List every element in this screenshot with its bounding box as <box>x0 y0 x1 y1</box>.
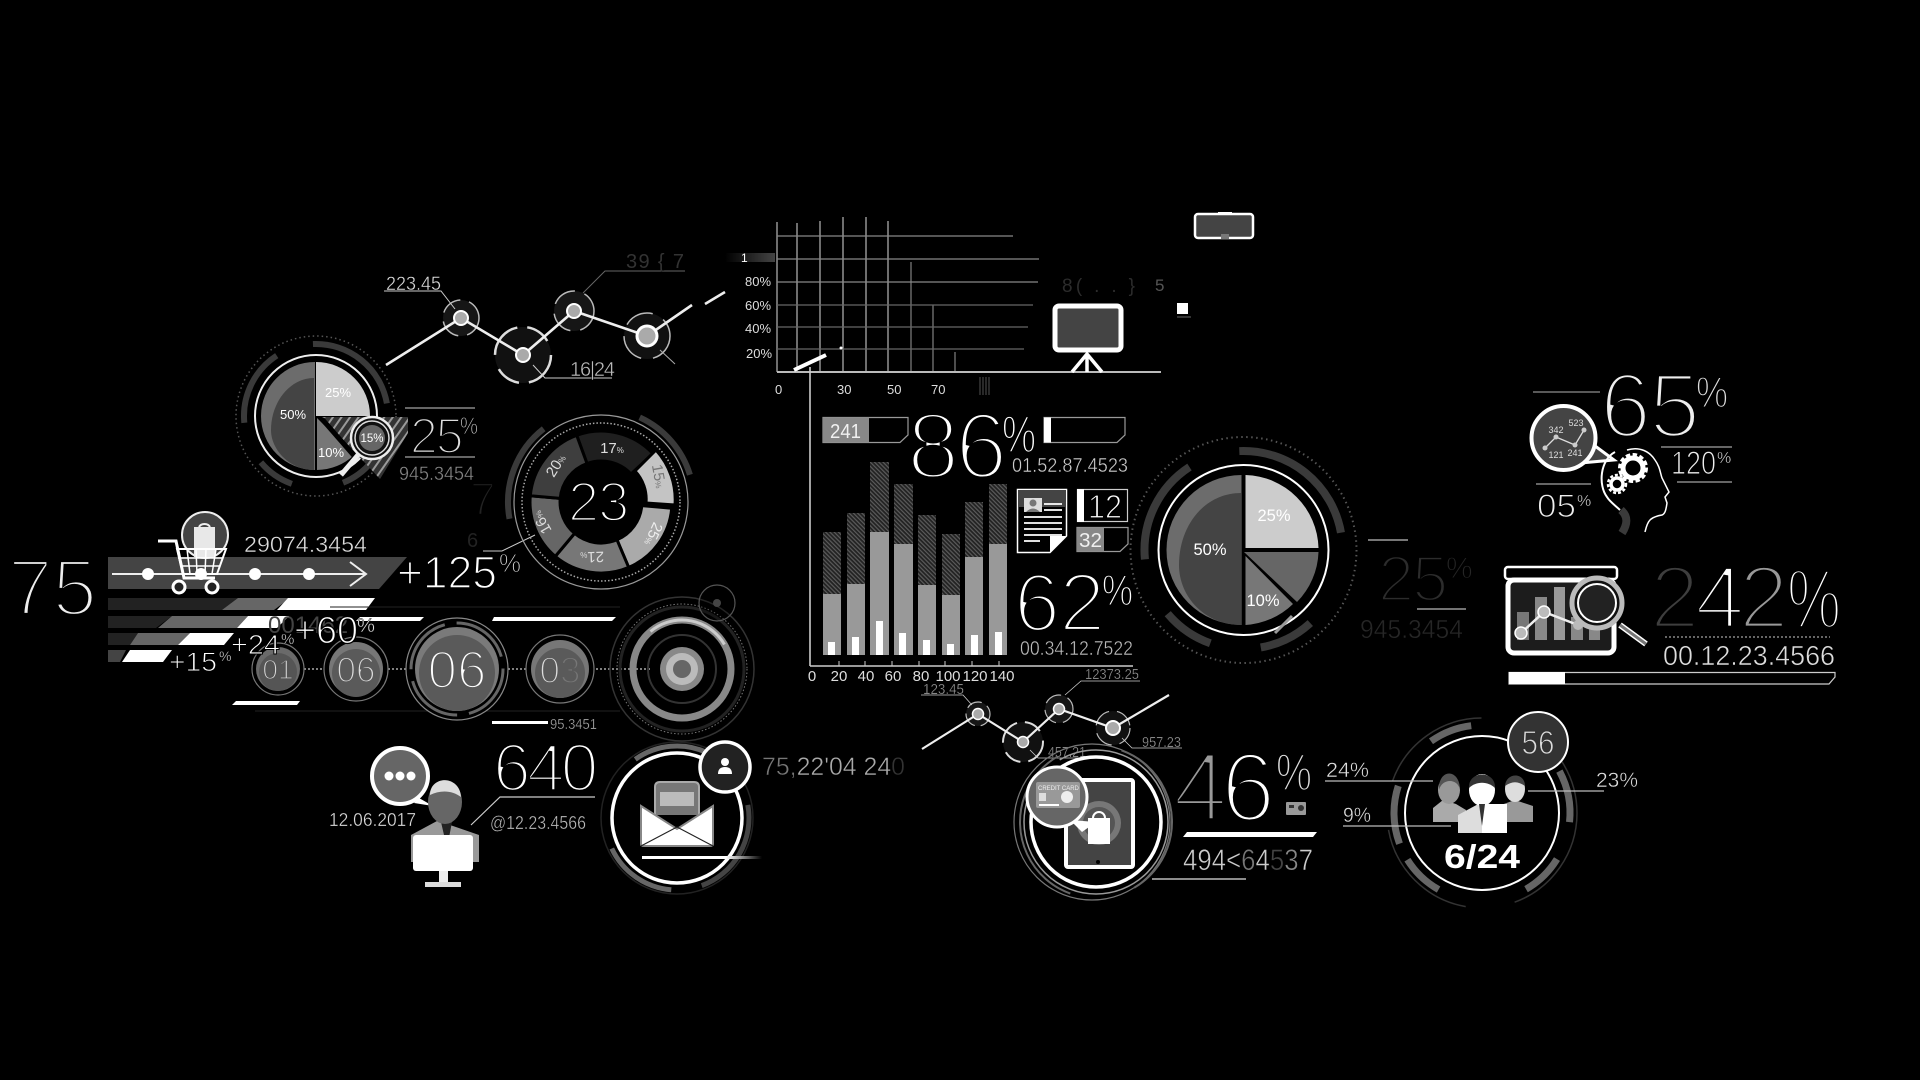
line chart: bottom: 457.21 <box>1048 744 1086 761</box>
line chart: top: 39 { 7 <box>626 251 684 273</box>
stat: +125%: +125 <box>397 547 497 598</box>
line chart: bottom: 12373.25 <box>1085 666 1139 683</box>
stat: 120%: 120 <box>1671 445 1716 481</box>
stats: +60% +24% +15% <box>169 610 375 677</box>
stat: 86%: 86 <box>907 393 1004 498</box>
grid chart: 0 <box>775 382 782 397</box>
stat: 65%: % <box>1696 368 1728 417</box>
ghost stat: 25% dim: 945.3454 <box>1360 614 1463 644</box>
stat: +125%: % <box>499 548 521 578</box>
stat: 46% <box>1173 732 1312 842</box>
bar chart: 140 <box>989 668 1015 685</box>
panel: small pie chart: 10% <box>318 445 344 460</box>
stats: +60% +24% +15%: +24 <box>231 629 280 660</box>
icon: analytics board <box>1505 567 1646 653</box>
stats: +60% +24% +15%: % <box>281 631 294 648</box>
stats: +60% +24% +15%: +60 <box>294 610 358 652</box>
line chart: bottom: 123.45 <box>923 681 964 698</box>
panel: mail circle <box>577 718 777 918</box>
ghost stat: 25% dim: % <box>1446 552 1473 585</box>
panel: donut 23: 17% <box>600 440 624 457</box>
stat: 62%: % <box>1102 566 1133 615</box>
panel: small pie chart: 25% <box>325 385 351 400</box>
panel: donut 23: 7 <box>470 473 496 525</box>
circle 01: 01 <box>262 654 294 685</box>
divider and value: 00.12.23.4566: 00.12.23.4566 <box>1663 640 1835 671</box>
grid chart: 60% <box>745 298 771 313</box>
circle 06 large: 06 <box>428 641 486 700</box>
stats: +60% +24% +15%: +15 <box>169 647 217 677</box>
label: 9%: 9% <box>1343 804 1371 827</box>
panel: donut 23: 16% <box>529 508 555 537</box>
stat: 640: 640 <box>493 730 597 806</box>
stat: 86%: % <box>1002 406 1036 464</box>
chat bubble icon <box>372 748 433 806</box>
panel: large pie chart <box>1104 410 1383 690</box>
line chart: bottom: 957.23 <box>1142 734 1181 751</box>
bar chart: 40 <box>858 668 874 685</box>
bar chart: 60 <box>885 668 901 685</box>
grid chart: 70 <box>931 382 945 397</box>
panel: large pie chart: 50% <box>1193 541 1227 559</box>
stat: 46%: 6 <box>1221 732 1276 842</box>
panel: circle row: 001462 <box>268 612 348 639</box>
circle 06 small: 06 <box>337 651 375 690</box>
icon: monitor <box>1195 212 1253 239</box>
line chart: bottom <box>921 666 1182 762</box>
stat: 65%: 65 <box>1600 355 1698 457</box>
stat: 46%: % <box>1276 744 1312 802</box>
bar chart: 100 <box>935 668 961 685</box>
panel: donut 23 <box>467 378 725 626</box>
icon: document <box>1018 490 1066 552</box>
ghost stat: 25% dim <box>1360 540 1473 644</box>
icon: tablet <box>1066 780 1133 867</box>
icon: people group <box>1433 774 1533 833</box>
circle 06 small <box>324 637 388 701</box>
line chart: top: 16|24 <box>570 359 615 381</box>
stat: 05% <box>1536 484 1591 524</box>
ghost stat: 25% dim: 25 <box>1378 542 1446 615</box>
icon: shopping cart <box>158 512 228 593</box>
icon: board on tripod: 8( . . } <box>1062 276 1135 297</box>
grid chart <box>725 217 1161 397</box>
icon: small credit card <box>1286 802 1306 815</box>
stat: 65% <box>1533 355 1728 457</box>
panel: donut 23: 20% <box>543 451 570 480</box>
icon: chart bubble: 342 <box>1548 425 1564 435</box>
value: 75,22'04 240: 75,22'04 240 <box>762 753 905 781</box>
circle 03 <box>526 635 594 703</box>
panel: people circle: 6/24 <box>1444 838 1521 875</box>
panel: donut 23: 21% <box>580 548 604 565</box>
stat: 25 percent: 945.3454 <box>399 464 474 485</box>
stat: 242%: 2 <box>1650 547 1700 647</box>
grid chart: 30 <box>837 382 851 397</box>
icon: credit card bubble <box>1027 767 1096 832</box>
panel: circle row: 95.3451 <box>550 716 597 733</box>
small square marker <box>1177 303 1191 317</box>
icon: board on tripod: 5 <box>1155 276 1164 295</box>
panel: large pie chart: 25% <box>1257 507 1291 525</box>
bar chart: 20 <box>831 668 847 685</box>
circle 01 <box>252 643 304 695</box>
panel: donut 23: 6 <box>467 530 478 552</box>
stat: 242%: 4 <box>1695 547 1744 647</box>
bar chart: 80 <box>913 668 929 685</box>
icon: chart bubble: 121 <box>1548 450 1564 460</box>
label: 23% <box>1528 769 1638 792</box>
value: 00.34.12.7522: 00.34.12.7522 <box>1020 638 1133 660</box>
tag: 32: 32 <box>1079 530 1102 552</box>
stat: 242%: 2 <box>1739 547 1788 647</box>
stat: 640: @12.23.4566 <box>490 813 586 833</box>
stat: 05%: 05 <box>1537 488 1576 524</box>
icon: person at computer <box>411 780 479 887</box>
stat: 05%: % <box>1577 493 1591 510</box>
line chart: top <box>384 251 725 383</box>
icon: magnifier 15%: 15% <box>360 433 384 445</box>
badge: 56: 56 <box>1522 724 1554 761</box>
stats: +60% +24% +15%: % <box>357 616 375 637</box>
icon: magnifier 15% <box>341 417 393 475</box>
tag: 32 <box>1077 528 1128 552</box>
grid chart: 50 <box>887 382 901 397</box>
hatched exploded slice <box>322 417 408 479</box>
stat: 120%: % <box>1717 450 1731 467</box>
icon: chart bubble <box>1532 406 1614 470</box>
icon: magnifier <box>1572 578 1646 644</box>
icon: board on tripod <box>1055 276 1164 372</box>
stat: 242% <box>1650 547 1841 647</box>
value: 29074.3454: 29074.3454 <box>244 532 367 557</box>
value: 01.52.87.4523: 01.52.87.4523 <box>1012 455 1128 477</box>
panel: tablet circle <box>999 725 1246 919</box>
badge: 56 <box>1508 712 1568 772</box>
bar chart <box>808 367 1133 685</box>
stat: 242%: % <box>1787 552 1841 646</box>
value: 494<64537: 494<64537 <box>1183 844 1313 877</box>
grid chart: 1 <box>741 251 748 265</box>
panel: circle row <box>232 607 650 733</box>
panel: donut 23: 15 % <box>648 463 669 489</box>
bar chart: 0 <box>808 668 816 685</box>
stats: +60% +24% +15%: % <box>219 648 231 664</box>
panel: people circle <box>1359 690 1605 936</box>
circle 03: 03 <box>539 650 581 691</box>
date: 12.06.2017: 12.06.2017 <box>329 810 416 830</box>
tag: empty bar <box>1044 418 1125 442</box>
panel: donut 23: 23 <box>568 470 628 533</box>
panel: target rings <box>610 585 754 741</box>
icon: credit card bubble: CREDIT CARD <box>1038 786 1080 792</box>
stat: 25 percent: % <box>460 413 478 440</box>
stat: 640 <box>471 730 597 833</box>
divider bar <box>1183 832 1317 837</box>
bar chart: 120 <box>962 668 988 685</box>
box: 12: 12 <box>1088 488 1122 525</box>
stat: 46%: 4 <box>1173 732 1228 842</box>
icon: head with gears <box>1602 449 1669 533</box>
panel: large pie chart: 10% <box>1246 592 1280 610</box>
label: 24% <box>1325 759 1433 782</box>
stat: 25 percent: 25 <box>410 408 462 464</box>
grid chart: 20% <box>746 346 772 361</box>
progress arrow band <box>108 557 407 589</box>
label: 23%: 23% <box>1596 769 1638 792</box>
label: 24%: 24% <box>1326 759 1369 782</box>
label: 9% <box>1343 804 1451 827</box>
tag: 241 <box>823 418 908 443</box>
panel: small pie chart <box>215 315 417 517</box>
stat: 62%: 62 <box>1014 556 1104 649</box>
grid chart: 40% <box>745 321 771 336</box>
stat: 75: 75 <box>8 543 97 632</box>
circle 06 large <box>406 618 508 720</box>
tag: 241: 241 <box>830 421 861 443</box>
grid chart: 80% <box>745 274 771 289</box>
icon: envelope <box>641 782 713 846</box>
icon: chart bubble: 241 <box>1567 448 1583 458</box>
icon: chart bubble: 523 <box>1568 418 1584 428</box>
line chart: top: 223.45 <box>386 274 441 295</box>
panel: small pie chart: 50% <box>280 407 306 422</box>
stat: 25 percent <box>399 408 478 485</box>
stacked stripe bars <box>108 598 375 662</box>
progress bar <box>1509 672 1835 684</box>
panel: donut 23: 25% <box>640 520 666 548</box>
